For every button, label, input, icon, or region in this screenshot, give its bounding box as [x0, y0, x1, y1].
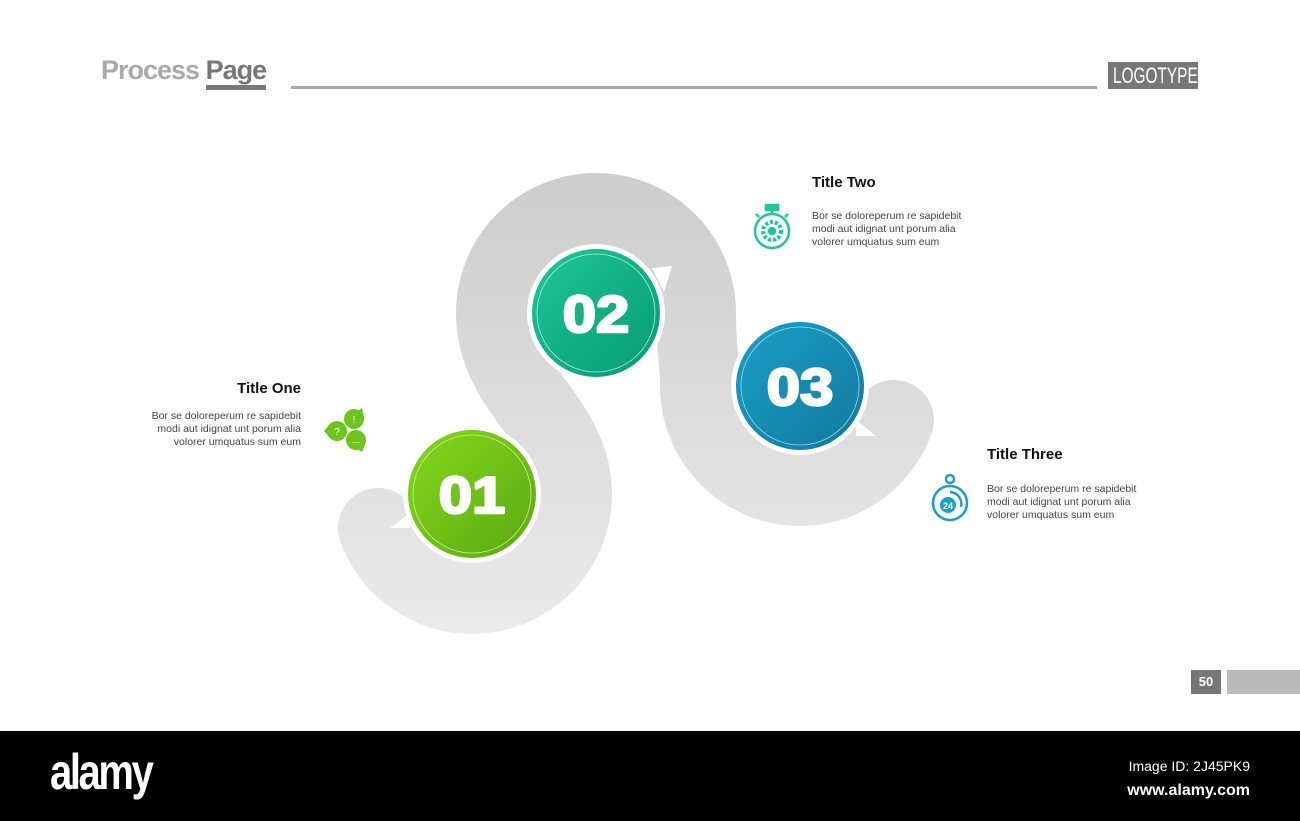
icon: speech bubbles: [324, 408, 366, 452]
text: title one: Title One: [237, 380, 301, 397]
title: Process Page: [101, 55, 266, 85]
circle 03: 03: [767, 358, 833, 416]
footer id: Image ID: 2J45PK9: [1129, 758, 1250, 774]
text: title one: volorer umquatus sum eum: [174, 436, 301, 448]
footer logo: alamy: [50, 744, 151, 800]
circle 02: 02: [563, 285, 629, 343]
text: title one: modi aut idignat unt porum alia: [157, 423, 301, 435]
icon: 24h stopwatch: [933, 475, 967, 520]
page bar: [1227, 670, 1300, 694]
text: title two: Title Two: [812, 174, 876, 191]
icon: 24h stopwatch: 24: [943, 501, 953, 511]
footer id: www.alamy.com: [1127, 782, 1250, 799]
footer id: [1127, 758, 1250, 799]
page number: [1191, 670, 1221, 694]
circle 03: [731, 317, 869, 455]
circle 01: [403, 425, 541, 563]
text: title three: modi aut idignat unt porum alia: [987, 496, 1131, 508]
text: title three: volorer umquatus sum eum: [987, 509, 1114, 521]
page number: 50: [1199, 674, 1213, 689]
header rule: [291, 86, 1097, 89]
text: title three: Title Three: [987, 446, 1063, 463]
circle 01: 01: [439, 466, 505, 524]
text: title two: volorer umquatus sum eum: [812, 236, 939, 248]
logotype: LOGOTYPE: [1113, 63, 1198, 88]
text: title one: [152, 380, 301, 448]
footer band: [0, 731, 1300, 821]
text: title two: Bor se doloreperum re sapidebit: [812, 210, 961, 222]
text: title three: Bor se doloreperum re sapidebit: [987, 483, 1136, 495]
text: title three: [987, 446, 1136, 521]
icon: gear stopwatch: [755, 205, 789, 248]
circle 02: [527, 244, 665, 382]
icon: speech bubbles: ?: [334, 427, 340, 438]
text: title two: [812, 174, 962, 248]
text: title one: Bor se doloreperum re sapidebit: [152, 410, 301, 422]
icon: speech bubbles: !: [353, 415, 355, 426]
grey S band: [378, 213, 894, 594]
text: title two: modi aut idignat unt porum alia: [812, 223, 956, 235]
icon: speech bubbles: …: [352, 435, 360, 445]
